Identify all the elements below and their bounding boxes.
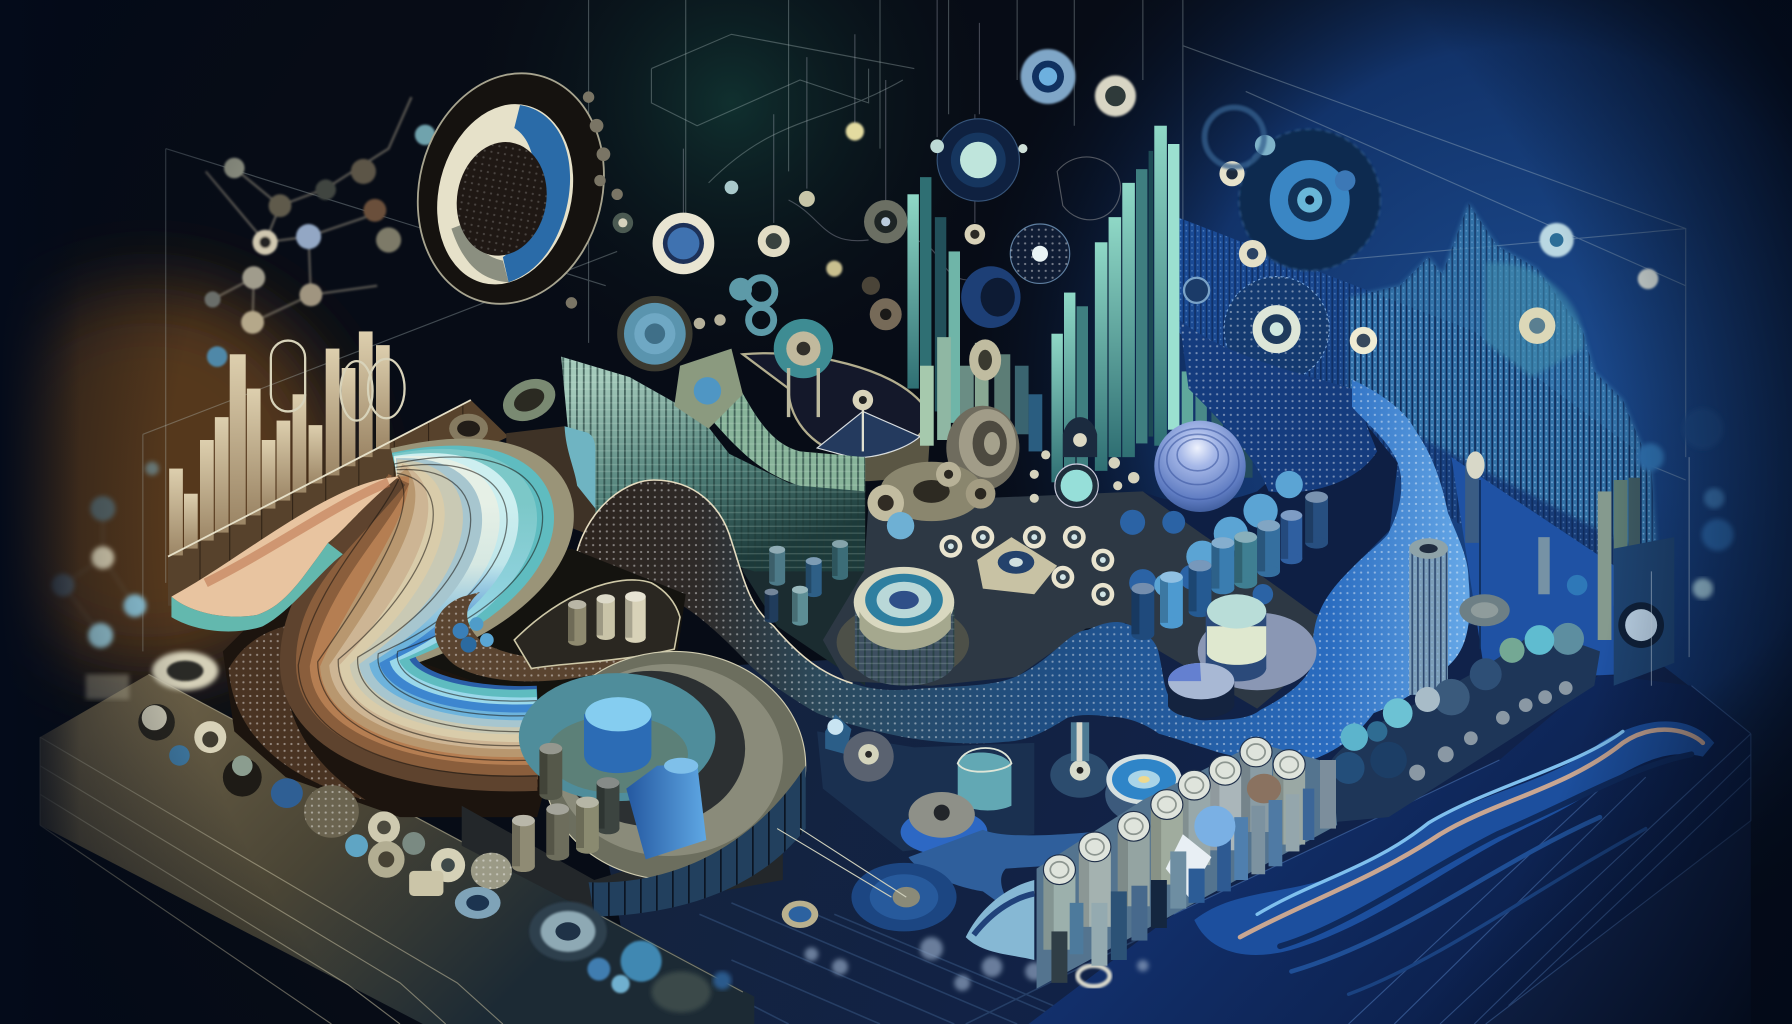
outline loops over bars xyxy=(271,341,405,421)
back wall grid lines xyxy=(143,0,1686,651)
floor: central navy ground xyxy=(571,617,1751,1024)
dial cluster: upper right xyxy=(1184,107,1734,551)
floor trace lines xyxy=(686,903,1234,1024)
bowl and ribbon xyxy=(617,296,931,491)
swoosh stripe contour lines xyxy=(298,457,543,776)
sphere xyxy=(1154,421,1246,512)
right wall panel: dotted blue chart xyxy=(1177,203,1657,680)
ornament cluster around centre xyxy=(765,417,1328,640)
blue flowing dotted wave xyxy=(573,379,1470,761)
ornament row on left platform xyxy=(86,651,731,1013)
base platform: left olive slab xyxy=(40,674,754,1024)
row of teal balls and grey stubs, right xyxy=(1326,623,1600,823)
swoosh: dark backing and brown mesh fringe xyxy=(223,480,686,817)
brown fan and blue balls in swoosh hollow xyxy=(435,580,680,681)
radial dial: large ring upper left xyxy=(394,53,628,324)
network graph: far left blurred nodes xyxy=(51,462,159,648)
teal bar chart left group xyxy=(907,177,1029,446)
green mesh bars xyxy=(449,357,865,571)
dotted blue backdrop behind sphere xyxy=(1143,320,1398,640)
central disc with blue cylinder xyxy=(462,651,806,917)
floor inside wave: grey ground xyxy=(823,491,1319,709)
cluster of rings: top centre xyxy=(930,49,1136,328)
grey speckled disc xyxy=(946,406,1019,490)
lower centre machines xyxy=(777,714,1183,991)
teal bar chart right group xyxy=(1029,126,1253,489)
tall blue column and right props xyxy=(1409,451,1713,695)
swoosh tip: peach and teal ribbon xyxy=(171,477,399,631)
swoosh stripes: S-curve fan xyxy=(288,453,559,783)
network graph: upper left nodes xyxy=(205,97,435,367)
dotted halo dial xyxy=(1224,277,1329,382)
dark ground under mesh xyxy=(731,514,865,686)
beige bar chart xyxy=(168,331,509,606)
stacked cylinder with pie discs xyxy=(1168,594,1317,718)
base platform: right navy slab xyxy=(1029,674,1751,1024)
lower centre column cluster xyxy=(1037,737,1337,989)
central gear cylinder xyxy=(837,567,969,686)
river stripes on right platform xyxy=(1194,721,1714,994)
small floating rings: upper centre xyxy=(613,0,994,333)
